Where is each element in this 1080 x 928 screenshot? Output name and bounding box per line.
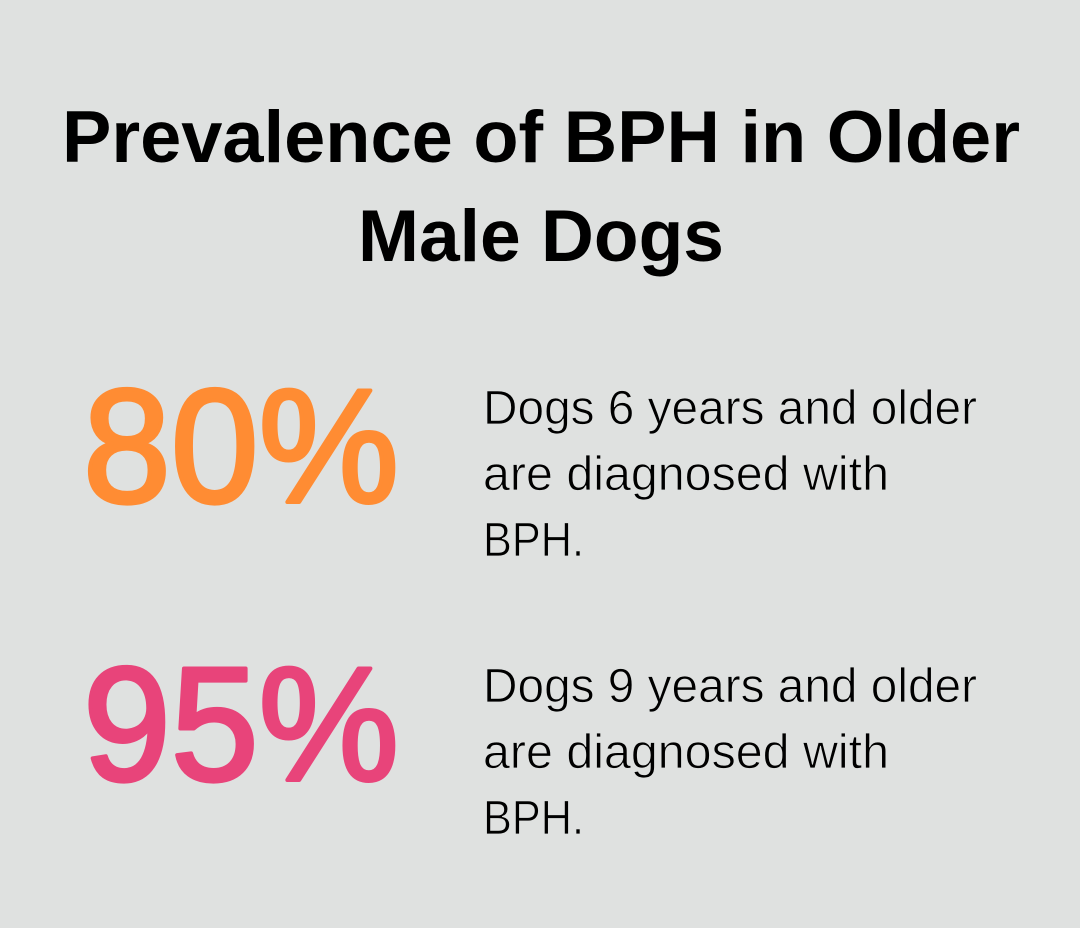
description: dogs 6 years and older: are diagnosed with [483,448,889,501]
statistic: 80%: 80% [83,356,399,537]
description: dogs 9 years and older [483,660,977,845]
title: Male Dogs [358,196,724,277]
description: dogs 9 years and older: Dogs 9 years and older [483,660,977,713]
title: Prevalence of BPH in Older [62,97,1020,178]
description: dogs 6 years and older [483,382,977,567]
title [62,97,1020,277]
description: dogs 6 years and older: BPH. [483,514,584,567]
statistic: 95%: 95% [83,634,399,815]
description: dogs 6 years and older: Dogs 6 years and older [483,382,977,435]
description: dogs 9 years and older: are diagnosed with [483,726,889,779]
description: dogs 9 years and older: BPH. [483,792,584,845]
